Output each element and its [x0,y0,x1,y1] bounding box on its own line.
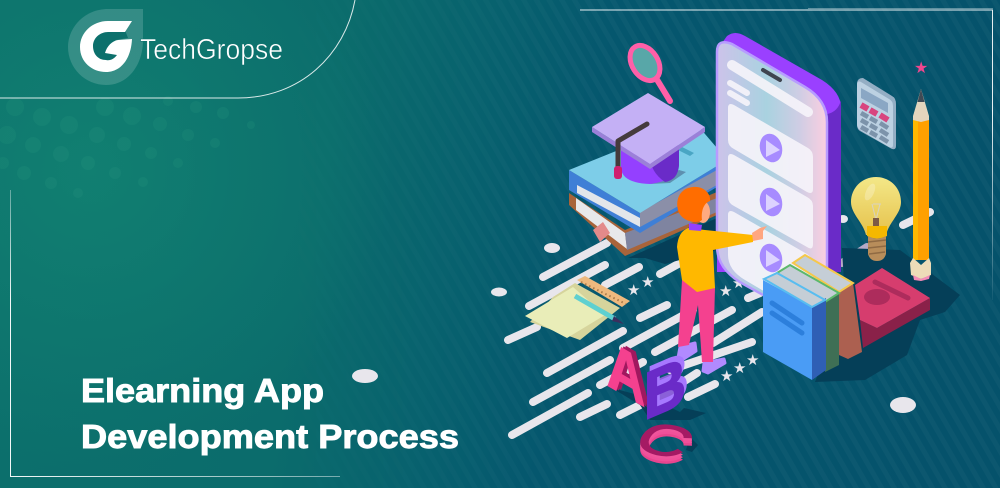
icon: book stack [569,120,717,256]
stars: ★ [719,283,732,300]
stars [627,274,759,385]
sweater [677,228,753,292]
shoes [678,343,725,373]
icon: calculator [857,78,896,149]
stars: ★ [746,352,759,369]
icon: red book [855,268,930,348]
white floor stripes and dots [352,212,930,435]
trousers [678,280,715,362]
icon: pencil [910,89,931,281]
bokeh dots [0,96,255,198]
stars: ★ [627,282,640,299]
icon: light bulb [851,177,901,261]
icon: star: ★ [914,60,928,77]
icon: person pointing at phone [677,187,767,373]
play buttons [757,131,785,275]
stars: ★ [733,360,746,377]
logo wordmark: TechGropse [140,34,283,66]
letter A: A [612,325,650,420]
icon: magnifying glass [624,40,670,101]
icon: graduation cap [592,93,705,184]
title [81,372,459,455]
letter A: A [607,326,645,422]
screen panels [728,65,813,320]
letter C: C [625,419,705,476]
face [696,201,710,223]
letter C: C [625,414,705,471]
stars: ★ [732,275,745,292]
upper book [569,120,717,233]
icon: smartphone [717,33,841,330]
title: Elearning App [81,372,324,409]
collar [689,223,702,231]
letter shadows [612,388,706,452]
hair [677,187,710,222]
letter A: A [609,325,648,421]
brown book [793,255,862,359]
stars: ★ [720,368,733,385]
title: Development Process [81,418,459,455]
icon: upright books [763,255,862,380]
green book [777,265,839,372]
speaker notch [763,70,780,80]
letter C: C [625,411,705,468]
letter C: C [625,416,705,473]
logo [68,9,283,85]
book stack shadow [628,218,717,264]
floor shadow [815,248,960,382]
background [0,0,582,488]
letter B: B [647,337,689,428]
blue book [763,273,826,380]
icon: notes, ruler and pen [525,276,630,340]
stars: ★ [641,274,654,291]
letter B: B [644,343,686,434]
hand [752,226,767,241]
logo mark [68,9,143,85]
lower book [569,192,717,256]
